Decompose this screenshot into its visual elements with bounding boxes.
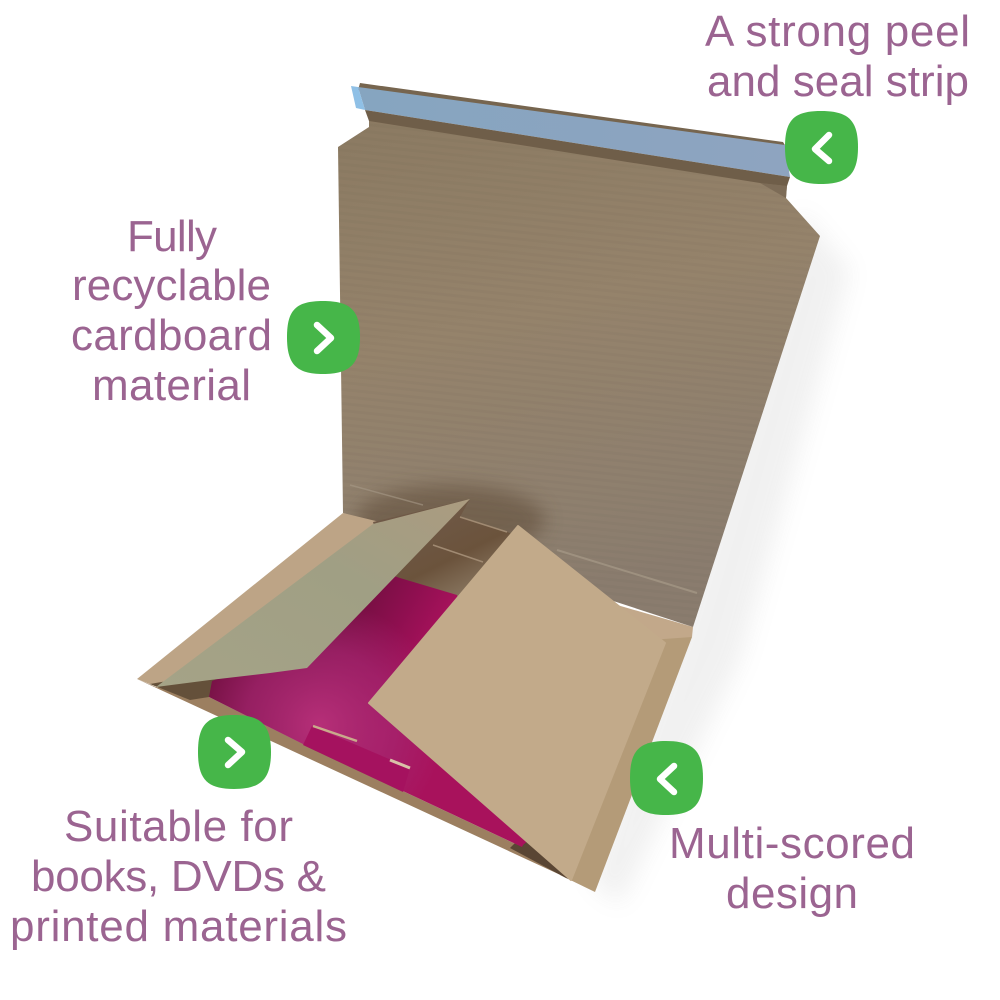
left folded flap, grey-green — [156, 499, 470, 687]
label: recyclable cardboard: material — [92, 361, 251, 410]
label: peel and seal strip — [705, 7, 970, 106]
label: multi-scored design: design — [726, 869, 858, 918]
button: left chevron for strip — [785, 111, 858, 184]
label: suitable for books: printed materials — [10, 902, 347, 951]
magenta book / printed material — [209, 576, 526, 847]
button: left chevron for multi-scored — [630, 741, 703, 815]
label: recyclable cardboard — [71, 212, 272, 410]
label: multi-scored design: Multi-scored — [669, 819, 915, 868]
label: multi-scored design — [669, 819, 915, 918]
magenta tab — [303, 726, 410, 792]
peel and seal strip — [351, 83, 790, 186]
label: recyclable cardboard: Fully — [127, 212, 217, 261]
base of mailer — [137, 499, 693, 892]
label: suitable for books: Suitable for — [64, 802, 293, 851]
label: suitable for books: books, DVDs & — [31, 852, 326, 901]
label: suitable for books — [10, 802, 347, 951]
button: right chevron for cardboard — [287, 301, 360, 374]
label: peel and seal strip: and seal strip — [707, 57, 969, 106]
label: recyclable cardboard: cardboard — [71, 311, 272, 360]
soft drop shadow behind mailer — [590, 210, 850, 905]
label: recyclable cardboard: recyclable — [72, 261, 271, 310]
right folded flap, light kraft — [369, 526, 665, 880]
label: peel and seal strip: A strong peel — [705, 7, 970, 56]
back panel of mailer — [338, 120, 820, 627]
illustration: open cardboard book mailer — [137, 83, 820, 892]
button: right chevron for books — [198, 715, 271, 789]
